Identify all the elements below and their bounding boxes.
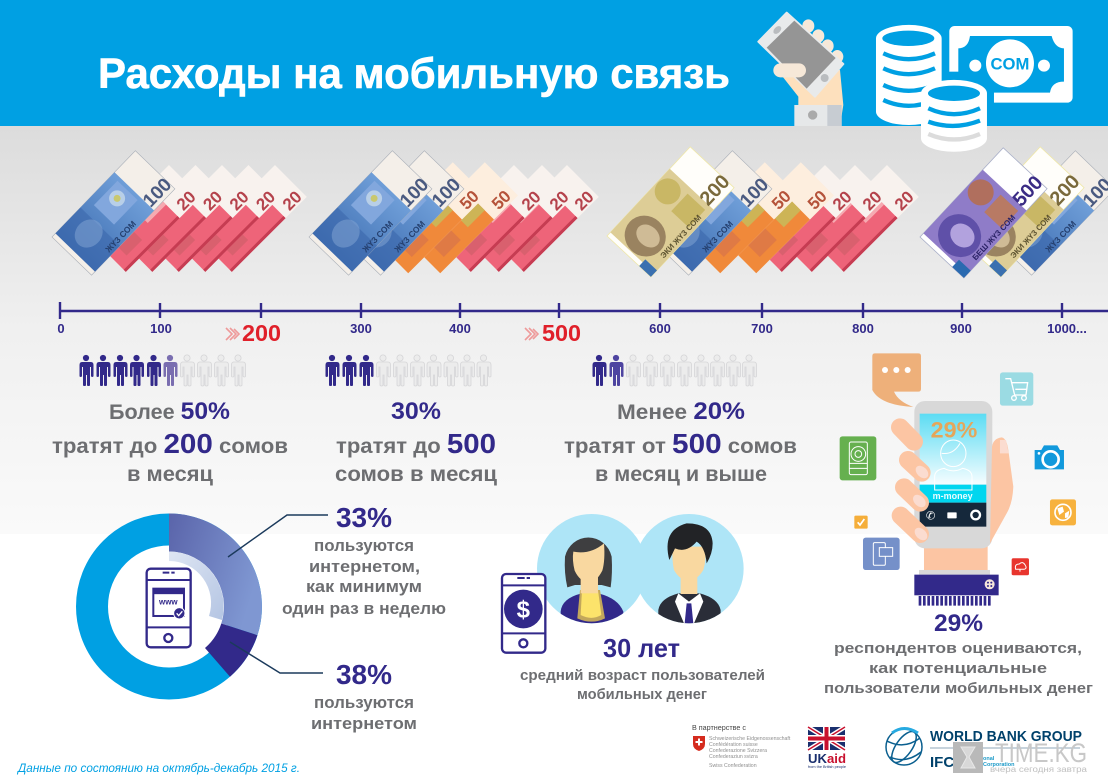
logo: Swiss Confederation: Confédération suisse: [709, 742, 758, 748]
illustration: hand with phone and apps: [840, 353, 1076, 606]
banknotes: from 500 to 800 som: [607, 146, 920, 277]
text: from 500: тратят от 500 сомов: [564, 428, 797, 459]
banknotes: up to 200 som: 20: [199, 187, 226, 214]
icon: check: [854, 516, 868, 529]
callout: 33%: [228, 502, 446, 618]
icon: hand holding phone: [758, 13, 843, 126]
hand: [900, 427, 1013, 543]
arm: [924, 545, 988, 571]
banknotes: up to 200 som: 100: [139, 174, 176, 212]
banknotes: up to 500 som: 100: [396, 174, 433, 212]
axis: spending scale: 700: [751, 321, 773, 336]
text: up to 500: [335, 398, 497, 486]
marker: 200: 200: [242, 320, 281, 346]
banknotes: up to 200 som: 20: [252, 187, 279, 214]
banknotes: from 500 to 800 som: 20: [829, 187, 856, 214]
icon: phone dollar: [502, 574, 545, 653]
banknotes: 800 som and above: БЕШ ЖҮЗ СОМ: [971, 213, 1018, 262]
callout: 33%: 33%: [336, 502, 392, 533]
icon: speech bubble: [872, 353, 921, 407]
banknotes: from 500 to 800 som: ЭКИ ЖҮЗ СОМ: [659, 213, 704, 260]
text: average age: 30 лет: [603, 633, 680, 663]
logo: Swiss Confederation: [692, 723, 791, 769]
logo: Swiss Confederation: Confederaziun svizra: [709, 754, 758, 760]
callout: 33%: интернетом,: [309, 558, 420, 576]
text: 29% respondents: пользователи мобильных денег: [824, 680, 1093, 697]
banknotes: up to 500 som: ЖҮЗ СОМ: [392, 219, 427, 255]
marker: 200: [226, 320, 281, 346]
banknotes: from 500 to 800 som: 20: [859, 187, 886, 214]
axis: spending scale: [57, 302, 1108, 336]
banknotes: from 500 to 800 som: 50: [804, 187, 831, 213]
logo: World Bank Group: [886, 728, 1082, 771]
callout: 38%: интернетом: [311, 715, 417, 733]
people row: less than 20%: [592, 355, 756, 386]
banknotes: from 500 to 800 som: 50: [768, 187, 795, 213]
banknotes: from 500 to 800 som: ЖҮЗ СОМ: [700, 219, 735, 255]
watermark: TIME.KG: вчера сегодня завтра: [990, 765, 1088, 774]
text: up to 200: тратят до 200 сомов: [52, 428, 288, 459]
logo: UK aid: from the British people: [808, 765, 846, 769]
icon: phone dollar: $: [517, 596, 530, 623]
banknotes: up to 200 som: ЖҮЗ СОМ: [103, 219, 138, 255]
logo: World Bank Group: onal: [983, 756, 995, 762]
people row: 30%: [325, 355, 491, 386]
text: 29% respondents: как потенциальные: [869, 660, 1047, 677]
banknotes: up to 500 som: [309, 150, 600, 276]
illustration: woman and man: [537, 514, 744, 623]
banknotes: 800 som and above: ЭКИ ЖҮЗ СОМ: [1009, 213, 1054, 260]
axis: spending scale: 400: [449, 321, 471, 336]
icon: coin stack small: [921, 80, 987, 152]
banknotes: from 500 to 800 som: 200: [696, 171, 735, 210]
logo: UK aid: [808, 727, 846, 769]
banknotes: 800 som and above: ЖҮЗ СОМ: [1043, 219, 1078, 255]
icon: blue phone: [863, 538, 900, 570]
text: from 500: [564, 398, 797, 486]
text: average age: средний возраст пользователей: [520, 667, 765, 684]
text: from 500: в месяц и выше: [595, 463, 767, 486]
icon: phone www: www: [158, 598, 178, 607]
banknotes: up to 500 som: 50: [488, 187, 515, 213]
text: up to 200: Более 50%: [109, 398, 230, 425]
banknotes: 800 som and above: 500: [1009, 172, 1048, 211]
callout: 38%: 38%: [336, 659, 392, 690]
banknotes: up to 200 som: [52, 150, 308, 276]
axis: spending scale: 300: [350, 321, 372, 336]
text: up to 200: в месяц: [127, 463, 213, 486]
icon: globe: [1050, 499, 1076, 525]
text: from 500: Менее 20%: [617, 398, 745, 425]
text: average age: мобильных денег: [577, 686, 707, 703]
header band: [0, 0, 1108, 126]
banknotes: up to 500 som: 100: [428, 174, 465, 212]
icon: green phone: [840, 436, 876, 480]
icon: cart: [1000, 372, 1033, 406]
text: 29% respondents: 29%: [934, 610, 983, 637]
banknotes: from 500 to 800 som: 100: [736, 174, 773, 212]
banknotes: up to 500 som: 20: [571, 187, 598, 214]
icon: phone www: [147, 569, 191, 647]
callout: 38%: пользуются: [314, 694, 414, 712]
marker: 500: 500: [542, 320, 581, 346]
axis: spending scale: 800: [852, 321, 874, 336]
callout: 33%: один раз в неделю: [282, 600, 446, 618]
icon: banknote COM: [940, 26, 1073, 108]
logo: Swiss Confederation: Swiss Confederation: [709, 763, 757, 769]
axis: spending scale: 900: [950, 321, 972, 336]
callout: 33%: пользуются: [314, 537, 414, 555]
icon: cloud: [1012, 558, 1029, 575]
phone: [914, 401, 992, 548]
marker: 500: [525, 320, 581, 346]
axis: spending scale: 100: [150, 321, 172, 336]
banknotes: from 500 to 800 som: 20: [891, 187, 918, 214]
text: average age: [520, 633, 765, 703]
logo: World Bank Group: Corporation: [983, 762, 1015, 768]
phone: ✆: [926, 510, 935, 522]
text: 29% respondents: респондентов оцениваются,: [834, 640, 1082, 657]
banknotes: up to 500 som: 20: [546, 187, 573, 214]
banknotes: up to 500 som: ЖҮЗ СОМ: [360, 219, 395, 255]
text: up to 200: [52, 398, 288, 486]
logo: Swiss Confederation: В партнерстве с: [692, 723, 746, 732]
icon: banknote COM: COM: [991, 54, 1029, 73]
banknotes: up to 200 som: 20: [173, 187, 200, 214]
banknotes: up to 500 som: 50: [456, 187, 483, 213]
logo: Swiss Confederation: Schweizerische Eidgenossenschaft: [709, 736, 791, 742]
footnote: Данные по состоянию на октябрь-декабрь 2015 г.: [16, 763, 300, 775]
logo: World Bank Group: IFC: [930, 754, 954, 771]
title: Расходы на мобильную связь: [98, 50, 730, 98]
axis: spending scale: 600: [649, 321, 671, 336]
cuff: [914, 570, 999, 606]
icon: coin stack large: [876, 25, 942, 125]
banknotes: 800 som and above: 200: [1046, 171, 1085, 210]
logo: World Bank Group: WORLD BANK GROUP: [930, 728, 1082, 745]
banknotes: 800 som and above: [920, 146, 1108, 278]
banknotes: up to 500 som: 20: [518, 187, 545, 214]
banknotes: up to 200 som: 20: [279, 187, 306, 214]
text: 29% respondents: [824, 610, 1093, 697]
banknotes: up to 200 som: 20: [226, 187, 253, 214]
logo: UK aid: UKaid: [808, 751, 846, 766]
text: up to 500: тратят до 500: [336, 428, 496, 459]
icon: camera: [1035, 445, 1064, 469]
axis: spending scale: 1000...: [1047, 321, 1087, 336]
text: up to 500: сомов в месяц: [335, 463, 497, 486]
people row: more than 50%: [79, 355, 246, 386]
phone: 29%: [931, 417, 977, 442]
logo: Swiss Confederation: Confederazione Svizzera: [709, 748, 767, 754]
callout: 38%: [230, 642, 417, 733]
phone: m-money: [933, 491, 973, 501]
watermark: TIME.KG: [953, 738, 1088, 774]
watermark: TIME.KG: TIME.KG: [995, 738, 1087, 768]
callout: 33%: как минимум: [306, 578, 422, 596]
text: up to 500: 30%: [391, 398, 441, 425]
donut chart: internet use: [92, 514, 262, 684]
axis: spending scale: 0: [57, 321, 65, 336]
